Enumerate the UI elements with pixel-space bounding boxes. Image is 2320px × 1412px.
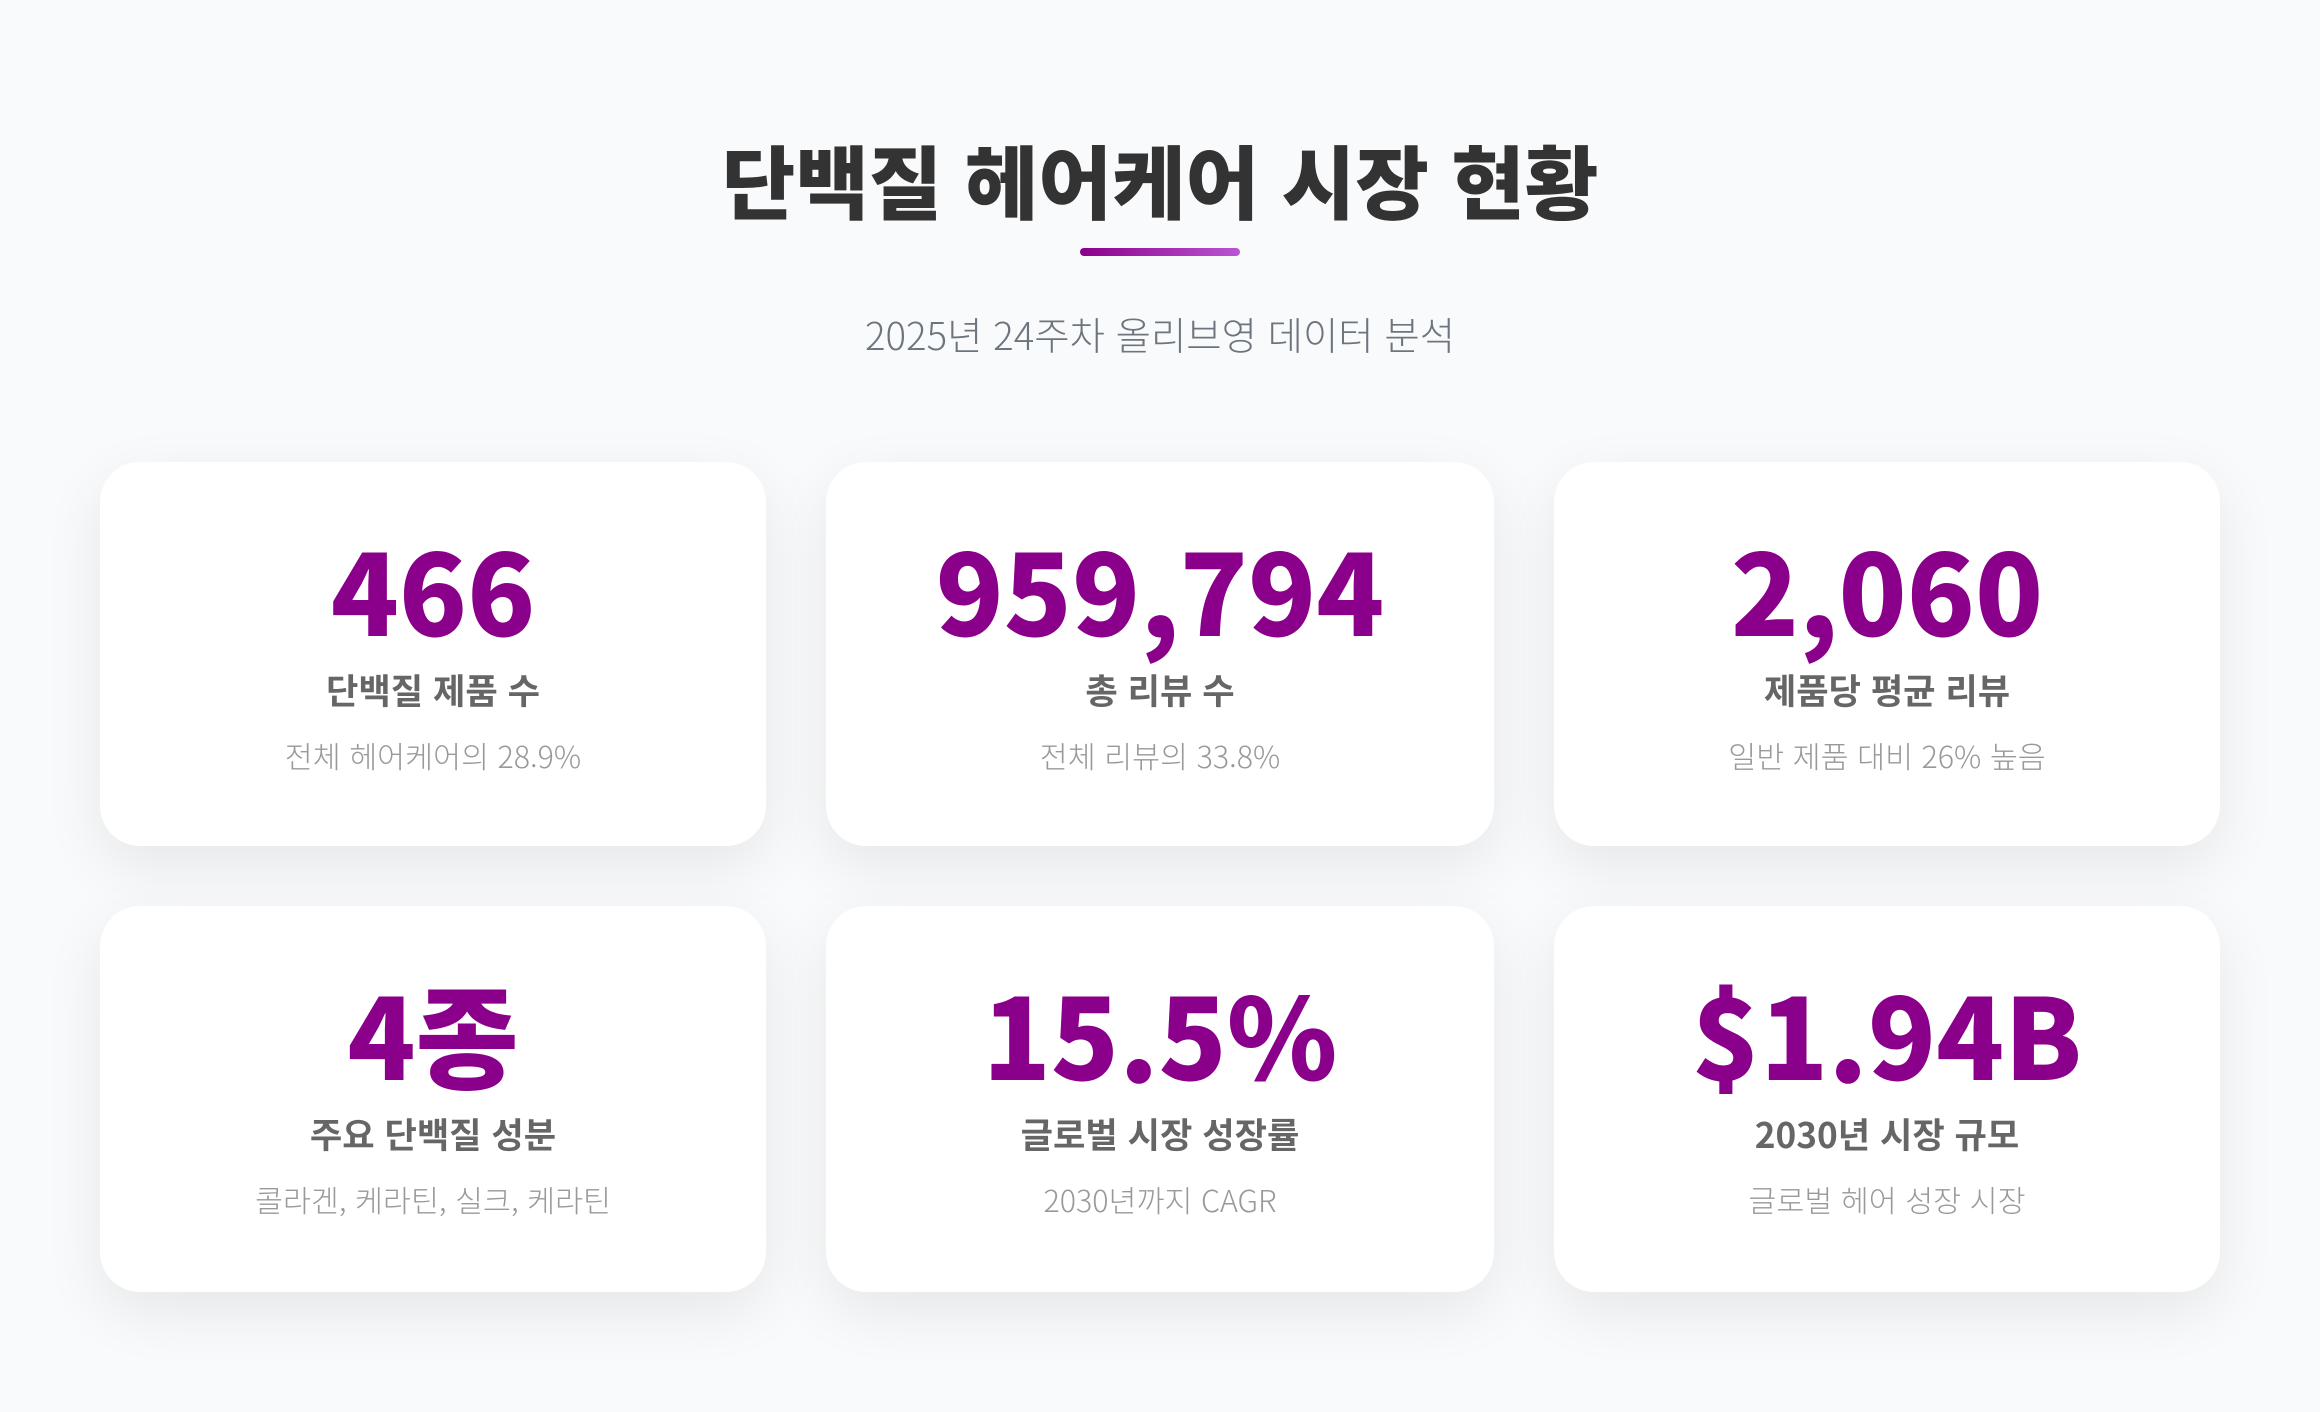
stat note: 2030년까지 CAGR [1044, 1177, 1276, 1221]
panel: 2030 market size [1554, 906, 2220, 1292]
stat label: 총 리뷰 수 [1085, 664, 1235, 715]
title underline accent [1080, 248, 1240, 256]
panel: main protein ingredients [100, 906, 766, 1292]
stat label: 2030년 시장 규모 [1755, 1108, 2019, 1159]
stat label: 제품당 평균 리뷰 [1764, 664, 2010, 715]
stat note: 콜라겐, 케라틴, 실크, 케라틴 [255, 1177, 611, 1221]
panel: global market growth rate [826, 906, 1494, 1292]
stat value: 959,794 [936, 507, 1384, 669]
stat label: 글로벌 시장 성장률 [1021, 1108, 1299, 1159]
stat label: 단백질 제품 수 [326, 664, 540, 715]
stat value: 466 [331, 507, 535, 669]
panel: total reviews [826, 462, 1494, 846]
subtitle: 2025년 24주차 올리브영 데이터 분석 [865, 306, 1455, 362]
title: 단백질 헤어케어 시장 현황 [722, 121, 1598, 237]
stat value: $1.94B [1692, 951, 2082, 1113]
stat note: 글로벌 헤어 성장 시장 [1748, 1177, 2026, 1221]
panel: protein product count [100, 462, 766, 846]
stat note: 전체 리뷰의 33.8% [1040, 733, 1280, 777]
stat value: 4종 [347, 951, 519, 1113]
panel: average reviews per product [1554, 462, 2220, 846]
stat note: 일반 제품 대비 26% 높음 [1728, 733, 2046, 777]
stat label: 주요 단백질 성분 [310, 1108, 556, 1159]
stat value: 2,060 [1731, 507, 2043, 669]
stat note: 전체 헤어케어의 28.9% [285, 733, 581, 777]
stat value: 15.5% [983, 951, 1337, 1113]
